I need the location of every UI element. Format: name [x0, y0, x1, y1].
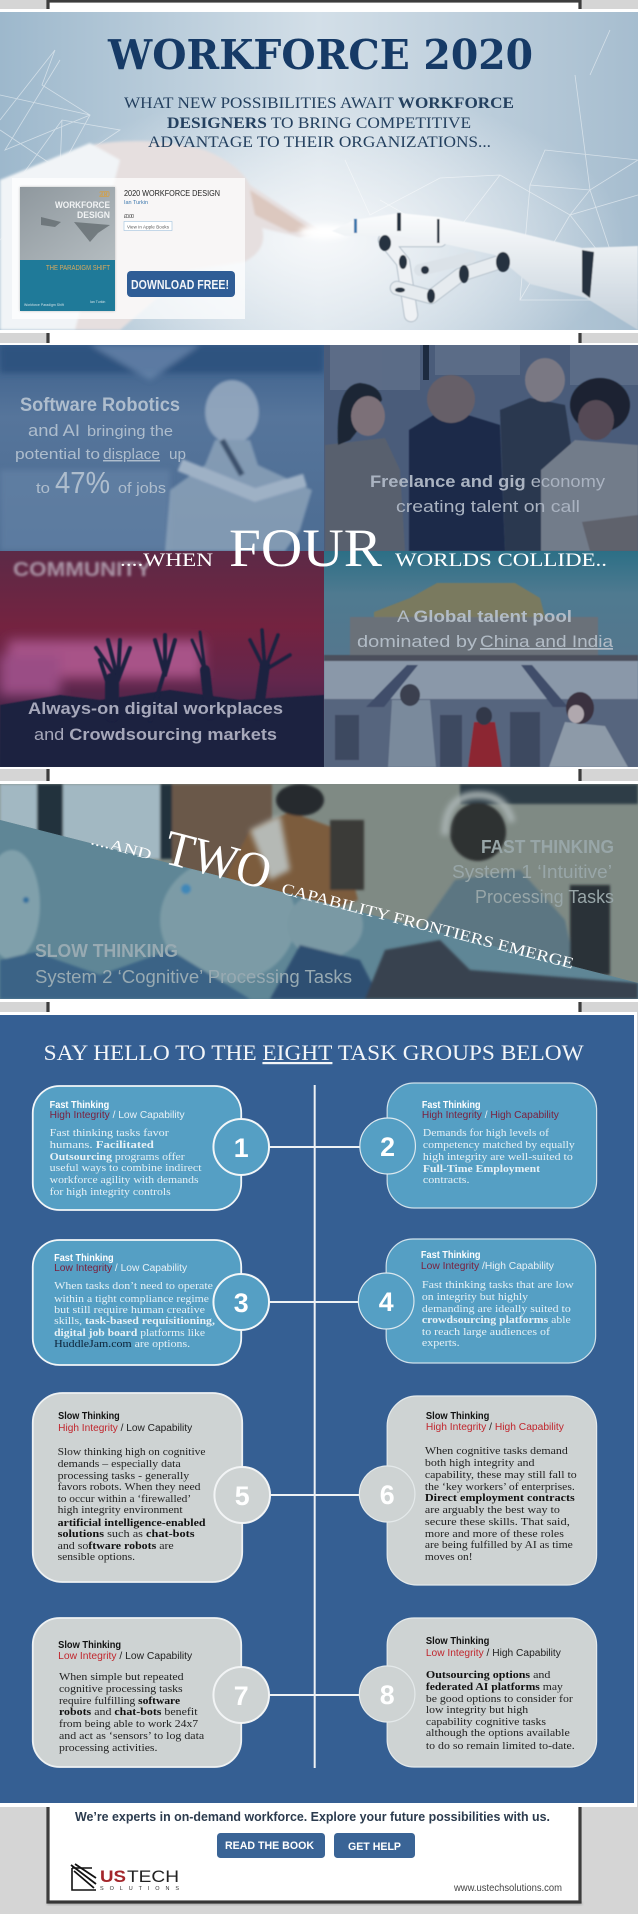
card 6: When cognitive tasks demand: [425, 1445, 568, 1457]
photo: freelance group: [324, 345, 638, 551]
card 5: sensible options.: [58, 1551, 135, 1563]
text: software robotics: and AI: [28, 421, 80, 440]
subtitle: [124, 95, 514, 151]
button: read the book: [217, 1833, 325, 1858]
text: software robotics: potential to: [15, 447, 100, 463]
card 6: secure these skills. That said,: [425, 1516, 570, 1528]
text: global talent pool: China and India: [480, 632, 614, 651]
human hand: [0, 141, 322, 330]
icon: book cover: 2020: [99, 190, 111, 199]
panel: four worlds: [0, 343, 638, 769]
card 4: demanding are ideally suited to: [422, 1303, 571, 1315]
text: digital workplaces: Always-on digital workplaces: [28, 699, 283, 718]
heading: two capability frontiers: ....AND: [89, 832, 153, 863]
photo: digital workplaces: COMMUNITY: [13, 559, 152, 581]
logo: ustech solutions: US: [100, 1868, 126, 1886]
card 8: to do so remain limited to-date.: [426, 1740, 575, 1752]
subtitle: ADVANTAGE TO THEIR ORGANIZATIONS...: [148, 134, 491, 151]
card 2: High Integrity / High Capability: [422, 1110, 560, 1121]
heading: eight task groups: SAY HELLO TO THE EIGHT TASK GROUPS BELOW: [44, 1040, 584, 1065]
text: slow thinking: SLOW THINKING: [35, 941, 178, 961]
subtitle: DESIGNERS TO BRING COMPETITIVE: [167, 115, 471, 132]
card 1: humans. Facilitated: [50, 1139, 154, 1151]
text: global talent pool: [357, 607, 614, 651]
card 7: Slow Thinking: [58, 1640, 121, 1651]
card 5: Slow Thinking: [58, 1411, 120, 1422]
card 1: useful ways to combine indirect: [50, 1162, 202, 1174]
card 6: Direct employment contracts: [425, 1492, 575, 1504]
card 8: be good options to consider for: [426, 1693, 573, 1705]
panel: eight task groups: [0, 1012, 637, 1807]
card 7: Low Integrity / Low Capability: [58, 1651, 193, 1662]
card 1: for high integrity controls: [50, 1186, 171, 1198]
button: get help: GET HELP: [348, 1841, 401, 1853]
icon: book cover: [20, 187, 115, 311]
text: digital workplaces: and Crowdsourcing markets: [34, 725, 277, 744]
card 2: Demands for high levels of: [423, 1127, 549, 1139]
card 6: are being fulfilled by AI as time: [425, 1539, 573, 1551]
button: read the book: READ THE BOOK: [225, 1840, 314, 1852]
card 8: [359, 1618, 597, 1767]
logo: ustech solutions: [71, 1864, 179, 1892]
panel: book download card: 2020 WORKFORCE DESIGN: [124, 189, 220, 198]
photo: slow thinking robots: [0, 815, 638, 999]
text: software robotics: 47%: [55, 465, 110, 500]
card 7: and act as ‘sensors’ to log data: [59, 1730, 204, 1742]
timeline spine: [241, 1085, 387, 1768]
photo: software robotics: [0, 345, 324, 551]
card 1: [33, 1086, 269, 1210]
card 8: federated AI platforms may: [426, 1681, 563, 1693]
icon: book cover: Ian Turkin: [90, 300, 105, 304]
text: software robotics: bringing the: [87, 424, 173, 440]
text: global talent pool: dominated by: [357, 632, 478, 651]
card 4: to reach large audiences of: [422, 1326, 550, 1338]
card 4: Fast Thinking: [421, 1250, 480, 1261]
card 6: the ‘key workers’ of enterprises.: [425, 1481, 575, 1493]
text: fast thinking: FAST THINKING: [481, 837, 614, 857]
card 4: crowdsourcing platforms able: [422, 1314, 571, 1326]
logo: ustech solutions: SOLUTIONS: [100, 1886, 179, 1892]
card 5: [33, 1393, 270, 1582]
card 6: [359, 1396, 597, 1585]
card 2: 2: [380, 1132, 395, 1162]
card 7: When simple but repeated: [59, 1671, 184, 1683]
card 4: on integrity but highly: [422, 1291, 529, 1303]
icon: book cover: WORKFORCE: [55, 200, 110, 210]
text: footer tagline: We’re experts in on-demand workforce. Explore your future possibilities with us.: [75, 1810, 550, 1824]
card 5: demands – especially data: [58, 1458, 181, 1470]
heading: two capability frontiers: [87, 800, 583, 979]
card 2: contracts.: [423, 1174, 470, 1186]
button: get help: [334, 1833, 415, 1858]
panel: book download card: Ian Turkin: [124, 200, 148, 206]
card 4: Low Integrity /High Capability: [421, 1261, 555, 1272]
card 5: processing tasks - generally: [58, 1470, 190, 1482]
text: website: www.ustechsolutions.com: [453, 1883, 562, 1894]
card 5: solutions such as chat-bots: [58, 1528, 195, 1540]
card 3: 3: [234, 1288, 249, 1318]
card 5: 5: [235, 1481, 250, 1511]
panel: book download card: £0.00: [124, 214, 134, 220]
text: freelance: [370, 472, 606, 516]
icon: book cover: DESIGN: [77, 210, 110, 220]
card 1: High Integrity / Low Capability: [50, 1110, 185, 1121]
panel: footer: [71, 1810, 562, 1894]
robot hand: [299, 213, 638, 330]
text: fast thinking: Processing Tasks: [475, 887, 614, 907]
card 3: skills, task-based requisitioning,: [54, 1315, 215, 1327]
card 5: high integrity environment: [58, 1504, 183, 1516]
card 4: experts.: [422, 1337, 460, 1349]
card 5: and software robots are: [58, 1540, 174, 1552]
text: software robotics: displace: [103, 447, 160, 463]
card 1: Fast Thinking: [50, 1100, 109, 1111]
heading: four worlds collide: WORLDS COLLIDE..: [395, 550, 607, 571]
fur collar and hair highlights: [250, 795, 512, 880]
button: download free: [127, 271, 235, 297]
card 7: processing activities.: [59, 1742, 158, 1754]
icon: book cover: THE PARADIGM SHIFT: [46, 263, 110, 272]
card 6: more and more of these roles: [425, 1528, 564, 1540]
text: fast thinking: [452, 837, 614, 907]
card 2: [360, 1083, 597, 1208]
panel: hero: [0, 9, 638, 333]
card 2: Full-Time Employment: [423, 1163, 540, 1175]
text: software robotics: up: [169, 447, 186, 463]
card 4: 4: [379, 1287, 394, 1317]
card 1: Fast thinking tasks favor: [50, 1127, 169, 1139]
card 3: Low Integrity / Low Capability: [54, 1263, 188, 1274]
title: WORKFORCE 2020: [107, 31, 533, 79]
card 6: are arguably the best way to: [425, 1504, 560, 1516]
card 7: 7: [234, 1681, 249, 1711]
heading: four worlds collide: FOUR: [229, 518, 382, 578]
text: software robotics: Software Robotics: [20, 395, 180, 416]
heading: two capability frontiers: CAPABILITY FRONTIERS EMERGE: [280, 881, 575, 973]
card 6: High Integrity / High Capability: [426, 1422, 565, 1433]
card 7: robots and chat-bots benefit: [59, 1706, 198, 1718]
card 8: although the options available: [426, 1727, 570, 1739]
card 8: capability cognitive tasks: [426, 1716, 546, 1728]
card 3: HuddleJam.com are options.: [54, 1338, 190, 1350]
card 6: 6: [380, 1480, 395, 1510]
card 7: from being able to work 24x7: [59, 1718, 199, 1730]
card 7: require fulfilling software: [59, 1695, 180, 1707]
card 1: workforce agility with demands: [50, 1174, 199, 1186]
card 3: within a tight compliance regime: [54, 1293, 209, 1305]
card 1: 1: [234, 1133, 249, 1163]
text: digital workplaces: [28, 699, 283, 744]
card 8: Low Integrity / High Capability: [426, 1648, 562, 1659]
card 3: [33, 1240, 269, 1365]
card 8: 8: [380, 1680, 395, 1710]
card 4: [358, 1239, 596, 1363]
text: freelance: Freelance and gig economy: [370, 472, 606, 491]
heading: two capability frontiers: TWO: [159, 819, 277, 900]
card 3: When tasks don’t need to operate: [54, 1280, 213, 1292]
card 7: cognitive processing tasks: [59, 1683, 183, 1695]
card 1: Outsourcing programs offer: [50, 1151, 185, 1163]
text: slow thinking: [35, 941, 352, 987]
card 2: high integrity are well-suited to: [423, 1151, 573, 1163]
panel: two frontiers: [0, 781, 638, 1002]
panel: book download card: View in Apple Books: [127, 224, 170, 229]
card 2: Fast Thinking: [422, 1100, 480, 1111]
logo: ustech solutions: TECH: [127, 1868, 179, 1886]
photo: digital workplaces: [0, 551, 324, 767]
card 6: moves on!: [425, 1551, 473, 1563]
text: software robotics: [15, 395, 186, 500]
card 8: Outsourcing options and: [426, 1669, 551, 1681]
heading: four worlds collide: [120, 518, 607, 578]
card 4: Fast thinking tasks that are low: [422, 1279, 574, 1291]
card 5: Slow thinking high on cognitive: [58, 1446, 206, 1458]
card 8: low integrity but high: [426, 1704, 529, 1716]
card 6: capability, these may still fall to: [425, 1469, 577, 1481]
card 3: digital job board platforms like: [54, 1327, 205, 1339]
card 6: both high integrity and: [425, 1457, 535, 1469]
card 3: but still require human creative: [54, 1304, 205, 1316]
subtitle: WHAT NEW POSSIBILITIES AWAIT WORKFORCE: [124, 95, 514, 112]
text: global talent pool: A Global talent pool: [397, 607, 572, 626]
photo: global talent pool: [324, 551, 638, 767]
card 5: to occur within a ‘firewalled’: [58, 1493, 191, 1505]
card 5: High Integrity / Low Capability: [58, 1423, 193, 1434]
text: fast thinking: System 1 ‘Intuitive’: [452, 862, 612, 882]
text: software robotics: to: [36, 481, 50, 497]
text: software robotics: of jobs: [118, 481, 166, 497]
card 5: artificial intelligence-enabled: [58, 1517, 205, 1529]
card 8: Slow Thinking: [426, 1636, 489, 1647]
button: download free: DOWNLOAD FREE!: [131, 278, 229, 292]
card 2: competency matched by equally: [423, 1139, 575, 1151]
card 3: Fast Thinking: [54, 1253, 114, 1264]
photo: fast thinking people: [0, 784, 638, 999]
text: slow thinking: System 2 ‘Cognitive’ Processing Tasks: [35, 967, 352, 987]
panel: book download card: [12, 178, 245, 319]
icon: book cover: Workforce Paradigm Shift: [24, 303, 64, 307]
card 6: Slow Thinking: [426, 1411, 489, 1422]
heading: four worlds collide: ....WHEN: [120, 550, 213, 571]
text: freelance: creating talent on call: [396, 497, 580, 516]
card 5: favors robots. When they need: [58, 1481, 201, 1493]
card 7: [33, 1618, 269, 1767]
